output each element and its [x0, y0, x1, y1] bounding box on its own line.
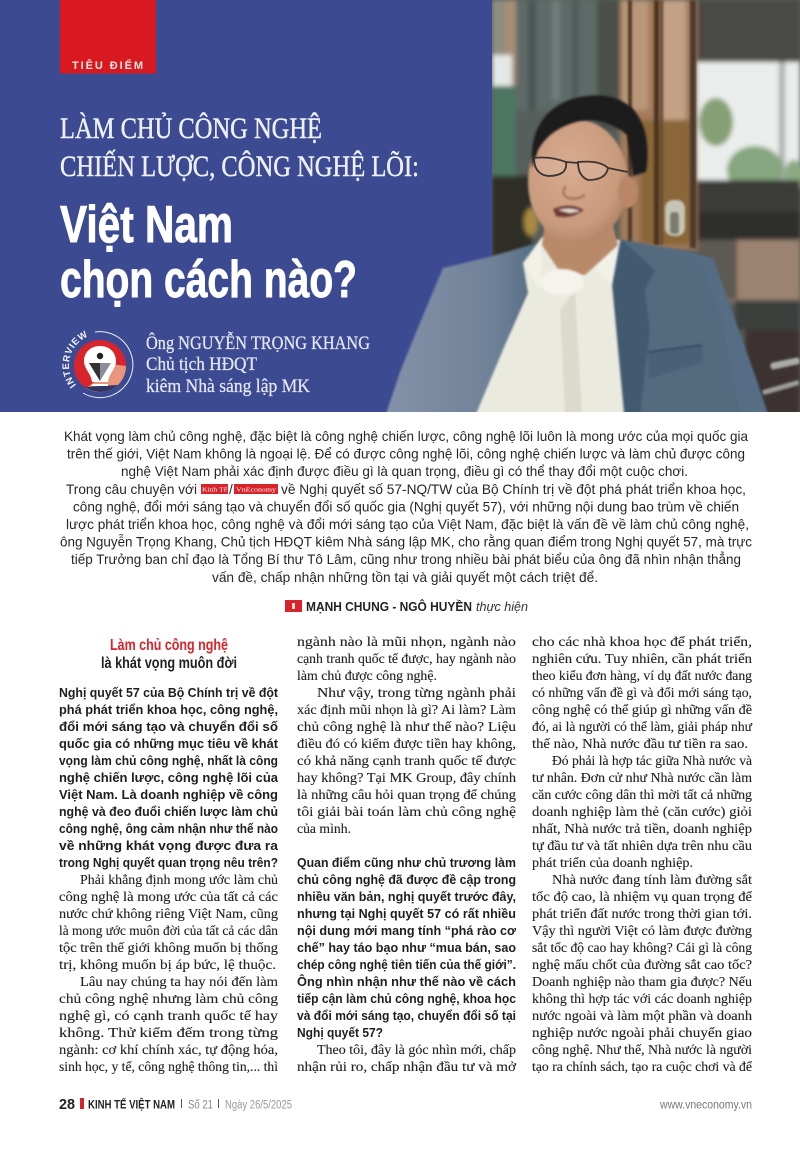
section tag: TIÊU ĐIỂM [60, 0, 156, 74]
column 3: nhất, Nhà nước trả tiền, doanh nghiệp [532, 821, 752, 836]
answer continued: cạnh tranh quốc tế được, hay ngành nào [297, 651, 516, 666]
question 2: chép công nghệ tiên tiến của thế giới”. [297, 957, 516, 972]
column 3: tốc độ cao, là nhiệm vụ quan trọng để [532, 889, 752, 904]
column 3: phát triển đất nước trong thời gian tới. [532, 906, 752, 921]
section heading: Làm chủ công nghệ [110, 637, 228, 654]
column 3: đó, ai là người có thể làm, giải pháp như [532, 719, 753, 734]
title [60, 112, 419, 309]
answer continued: xác định mũi nhọn là gì? Ai làm? Làm [297, 702, 516, 717]
intro text block: về Nghị quyết số 57-NQ/TW của Bộ Chính trị về đột phá phát triển khoa học, [281, 482, 746, 497]
column 3: Đó phải là hợp tác giữa Nhà nước và [552, 753, 752, 768]
answer 1: công nghệ là mong ước của tất cả các [59, 889, 278, 904]
column 3: có những vấn đề gì và đổi mới sáng tạo, [532, 685, 752, 700]
logos: Kinh Te / VnEconomy: VnEconomy [236, 486, 277, 494]
question 1: vọng làm chủ công nghệ, nhất là công [59, 753, 278, 768]
column 3: nghiệp nước ngoài phải chuyển giao [532, 1025, 752, 1040]
answer 1: chủ công nghệ nhưng làm chủ công [59, 991, 278, 1006]
answer 1: Phải khẳng định mong ước làm chủ [80, 872, 278, 887]
title: Việt Nam [60, 196, 233, 254]
intro text block: ông Nguyễn Trọng Khang, Chủ tịch HĐQT kiêm Nhà sáng lập MK, cho rằng quan điểm trong Nghị quyết 57, mà trực [60, 535, 752, 550]
answer continued: làm chủ được công nghệ. [297, 668, 437, 683]
answer 1: là mong ước muôn đời của tất cả các dân [59, 923, 278, 938]
glasses [534, 158, 628, 180]
question 2: và đổi mới sáng tạo, chuyển đổi số tại [297, 1008, 516, 1023]
column 3 [532, 634, 753, 1074]
icon: interview badge: INTERVIEW [62, 330, 86, 389]
intro text block [60, 429, 752, 585]
column 1 [59, 637, 279, 1074]
question 1: công nghệ, ông cảm nhận như thế nào [59, 821, 278, 836]
question 1: về những khát vọng được đưa ra [59, 838, 279, 853]
shirt [476, 237, 624, 414]
photo: interviewee in office [386, 0, 800, 415]
answer 1: tộc trên thế giới không muốn bị thống [59, 940, 278, 955]
answer continued: chủ công nghệ là như thế nào? Liệu [297, 719, 516, 734]
question 1: Việt Nam. Là doanh nghiệp về công [59, 787, 278, 802]
answer 1: ngành: cơ khí chính xác, tự động hóa, [59, 1042, 278, 1057]
question 2 [297, 855, 517, 1040]
column 3: tạo ra chính sách, tạo ra cuộc chơi và để [532, 1059, 752, 1074]
intro text block: Trong câu chuyện với [66, 482, 197, 497]
question 1 [59, 685, 279, 870]
column 3: công nghệ. Như thế, Nhà nước là người [532, 1042, 752, 1057]
neck [542, 222, 618, 275]
question 1: Nghị quyết 57 của Bộ Chính trị về đột [59, 685, 279, 700]
question 1: nghệ và đeo đuổi chiến lược làm chủ [59, 804, 278, 819]
byline [285, 599, 528, 614]
footer: KINH TẾ VIỆT NAM [88, 1096, 175, 1112]
column 3: Vậy thì người Việt có làm được đường [532, 923, 752, 938]
question 2: nội dung mới mang tính “phá rào cơ [297, 923, 517, 938]
question 2: Quan điểm cũng như chủ trương làm [297, 855, 516, 870]
answer 2: nhận rủi ro, chấp nhận đầu tư và mở [297, 1059, 517, 1074]
answer continued [297, 634, 516, 836]
footer: 28 [59, 1097, 75, 1113]
column 3: Doanh nghiệp nào tham gia được? Nếu [532, 974, 752, 989]
column 3: doanh nghiệp làm thẻ (căn cước) giỏi [532, 804, 752, 820]
column 3: sắt tốc độ cao hay không? Cái gì là công [532, 940, 752, 955]
sharp dark stripes on copper panel [628, 0, 800, 395]
undershirt [540, 269, 584, 295]
question 2: Nghị quyết 57? [297, 1025, 383, 1040]
title: CHIẾN LƯỢC, CÔNG NGHỆ LÕI: [60, 149, 419, 183]
question 1: trong Nghị quyết quan trọng nêu trên? [59, 855, 278, 870]
intro text block: Khát vọng làm chủ công nghệ, đặc biệt là công nghệ chiến lược, công nghệ lõi luôn là mong ước của mọi quốc gia [64, 429, 748, 444]
title: chọn cách nào? [60, 251, 357, 309]
nose and mouth [553, 186, 585, 217]
answer 1: nghệ gì, có cạnh tranh quốc tế hay [59, 1008, 278, 1023]
column 3: căn cước công dân thì mời tất cả những [532, 787, 752, 802]
byline: thực hiện [476, 600, 528, 614]
question 2: nhưng tại Nghị quyết 57 có rất nhiều [297, 906, 516, 921]
face [528, 120, 638, 244]
interviewee name and title: kiêm Nhà sáng lập MK [146, 376, 310, 397]
column 3: phát triển của doanh nghiệp. [532, 855, 693, 870]
byline: MẠNH CHUNG - NGÔ HUYỀN [306, 599, 472, 614]
answer continued: của mình. [297, 821, 351, 836]
column 3: nghiên cứu. Tuy nhiên, cần phát triển [532, 651, 752, 666]
title: LÀM CHỦ CÔNG NGHỆ [60, 112, 322, 145]
answer continued: Như vậy, trong từng ngành phải [317, 685, 516, 700]
answer 1 [59, 872, 278, 1074]
footer [59, 1096, 752, 1113]
answer 2: Theo tôi, đây là góc nhìn mới, chấp [317, 1042, 516, 1057]
intro text block: trên thế giới, Việt Nam không là ngoại lệ. Để có được công nghệ lõi, công nghệ chiến lược và làm chủ được công [67, 447, 745, 462]
column 3: nghệ mấu chốt của đường sắt cao tốc? [532, 957, 752, 972]
answer continued: điều đó có kiếm được tiền hay không, [297, 736, 516, 751]
answer 1: Lâu nay chúng ta hay nói đến làm [80, 974, 278, 989]
column 3: tự đầu tư và tất nhiên dựa trên nhu cầu [532, 838, 752, 853]
answer continued: ngành nào là mũi nhọn, ngành nào [297, 634, 516, 649]
answer continued: có khả năng cạnh tranh quốc tế được [297, 753, 516, 768]
section heading [101, 637, 237, 672]
answer 1: nước chứ không riêng Việt Nam, cũng [59, 906, 278, 921]
answer 1: trị, không muốn bị áp bức, lệ thuộc. [59, 957, 276, 972]
column 3: tư nhân. Đơn cử như Nhà nước cần làm [532, 770, 752, 785]
header panel: blue background [0, 0, 493, 412]
jacket [386, 240, 768, 414]
icon: interview badge [62, 330, 134, 398]
footer: Số 21 [188, 1100, 213, 1112]
column 3: Nhà nước đang tính làm đường sắt [552, 872, 752, 887]
column 3: không thì hợp tác với các doanh nghiệp [532, 991, 752, 1006]
logos: Kinh Te / VnEconomy: Kinh Tế [202, 486, 228, 494]
column 3: công nghệ có thể giúp gì những vấn đề [532, 702, 752, 717]
question 2: chế” hay táo bạo như “mua bán, sao [297, 940, 516, 955]
section tag: TIÊU ĐIỂM: TIÊU ĐIỂM [72, 59, 143, 72]
question 2: nhiều văn bản, nghị quyết trước đây, [297, 889, 516, 904]
intro text block: vấn đề, chấp nhận những tồn tại và giải quyết một cách triệt để. [212, 570, 598, 585]
answer continued: là những câu hỏi quan trọng để chúng [297, 787, 516, 802]
question 2: chủ công nghệ đã được đề cập trong [297, 872, 516, 887]
answer continued: tôi giải bài toán làm chủ công nghệ [297, 804, 516, 819]
footer: www.vneconomy.vn [659, 1100, 752, 1112]
column 3: cho các nhà khoa học để phát triển, [532, 634, 752, 649]
answer 1: sinh học, y tế, công nghệ thông tin,... thì [59, 1059, 278, 1074]
intro text block: công nghệ, đổi mới sáng tạo và chuyển đổi số quốc gia (Nghị quyết 57), với những nội dung bao trùm về chiến [73, 499, 739, 514]
answer 1: không. Thử kiểm đếm trong từng [59, 1025, 278, 1040]
interviewee name and title: Ông NGUYỄN TRỌNG KHANG [146, 332, 370, 354]
intro text block: tiếp Trưởng ban chỉ đạo là Tổng Bí thư Tô Lâm, cũng như trong nhiều bài phát biểu của ông đã nhìn nhận thẳng [71, 552, 741, 567]
answer 2 [297, 1042, 517, 1074]
hair [532, 95, 648, 176]
column 3: thế nào, Nhà nước đầu tư tiền ra sao. [532, 736, 748, 751]
question 1: đổi mới sáng tạo và chuyển đổi số [59, 719, 278, 734]
question 1: phá phát triển khoa học, công nghệ, [59, 702, 278, 717]
question 1: nghệ chiến lược, công nghệ lõi của [59, 770, 279, 785]
interviewee name and title: Chủ tịch HĐQT [146, 354, 257, 375]
question 1: quốc gia có những mục tiêu về khát [59, 736, 279, 751]
column 3: nước ngoài và làm một phần và doanh [532, 1008, 752, 1023]
column 3: theo kiểu đơn hàng, ví dụ đất nước đang [532, 668, 752, 683]
interviewee name and title [146, 332, 370, 397]
logos: Kinh Te / VnEconomy: / [229, 482, 233, 497]
column 2 [297, 634, 517, 1074]
logos: Kinh Te / VnEconomy [201, 482, 278, 497]
footer: Ngày 26/5/2025 [225, 1100, 292, 1112]
intro text block: lược phát triển khoa học, công nghệ và đổi mới sáng tạo của Việt Nam, đặc biệt là vấn đề về làm chủ công nghệ, [66, 517, 749, 532]
section heading: là khát vọng muôn đời [101, 655, 237, 672]
question 2: tiếp cận làm chủ công nghệ, khoa học [297, 991, 516, 1006]
intro text block: nghệ Việt Nam phải xác định được điều gì là quan trọng, điều gì có thể thay đổi một cuộc chơi. [121, 464, 688, 479]
photo background: office interior [492, 0, 800, 415]
question 2: Ông nhìn nhận như thế nào về cách [297, 974, 516, 989]
answer continued: hay không? Tại MK Group, đây chính [297, 770, 516, 785]
